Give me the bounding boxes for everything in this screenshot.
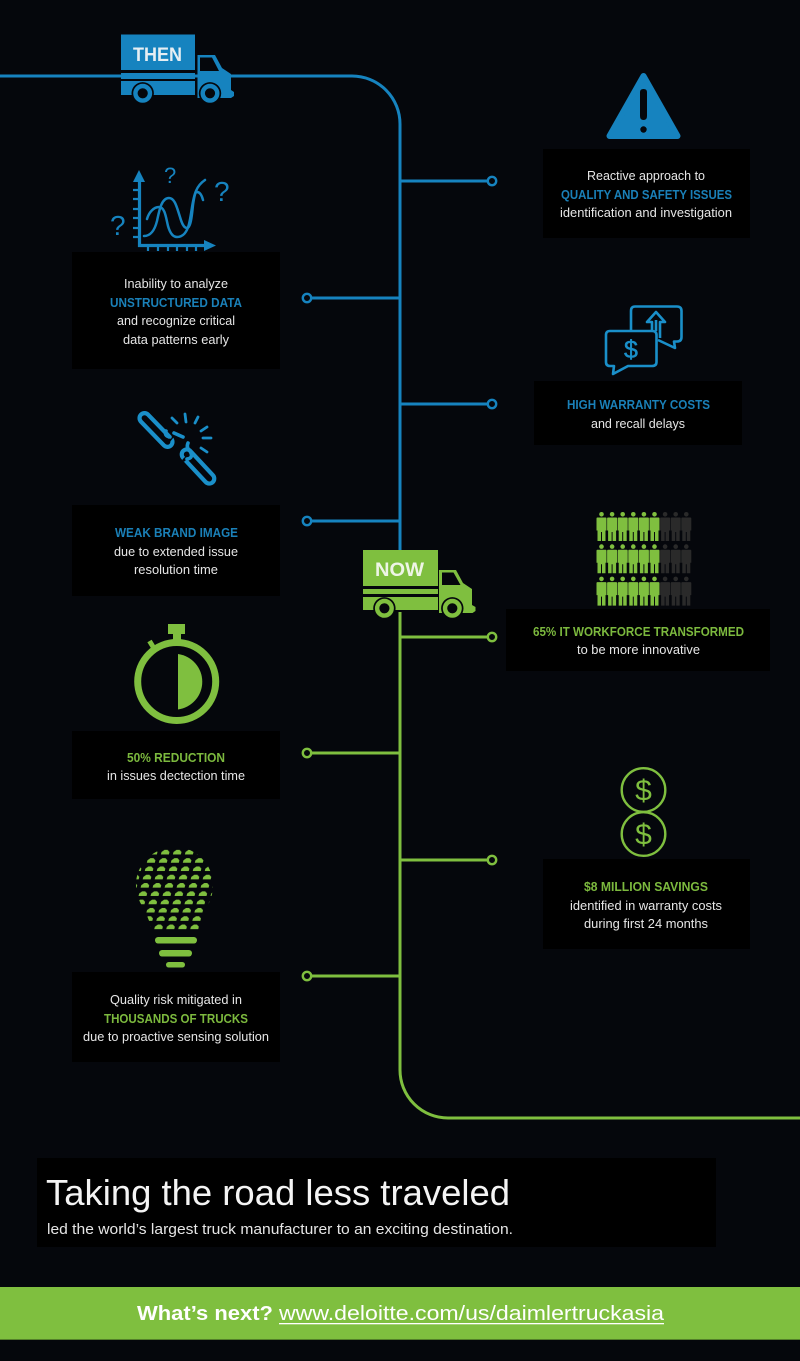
icon: light bulb of trucks	[136, 847, 213, 968]
panel: 50% reduction: in issues dectection time	[107, 769, 245, 783]
panel: high warranty costs: HIGH WARRANTY COSTS	[567, 398, 710, 412]
panel: unstructured data: and recognize critical	[117, 314, 235, 328]
panel: weak brand image: due to extended issue	[114, 545, 238, 559]
icon: two dollar coins: $	[635, 774, 652, 808]
icon: two dollar coins: $	[635, 818, 652, 852]
icon: warning triangle	[610, 76, 678, 136]
icon: NOW truck	[363, 550, 476, 620]
panel: quality and safety issues: Reactive approach to	[587, 169, 705, 183]
panel: unstructured data: Inability to analyze	[124, 277, 228, 291]
icon: stopwatch half	[138, 624, 216, 720]
icon: two dollar coins	[622, 768, 665, 856]
connector: IT workforce	[400, 633, 496, 641]
panel: $8 million savings: during first 24 months	[584, 917, 708, 931]
panel: IT workforce transformed	[506, 609, 770, 671]
panel: thousands of trucks: Quality risk mitigated in	[110, 993, 242, 1007]
panel: $8 million savings: $8 MILLION SAVINGS	[584, 880, 708, 894]
closing statement panel	[37, 1158, 716, 1247]
connector: warranty costs	[400, 400, 496, 408]
connector: savings	[400, 856, 496, 864]
road line: then (blue)	[0, 76, 400, 552]
panel: unstructured data	[72, 252, 280, 369]
footer band	[0, 1287, 800, 1340]
panel: weak brand image	[72, 505, 280, 596]
connector: quality and safety	[400, 177, 496, 185]
icon: THEN truck	[121, 34, 234, 105]
icon: chat bubbles with dollar and arrow	[606, 306, 682, 374]
panel: $8 million savings	[543, 859, 750, 949]
panel: thousands of trucks	[72, 972, 280, 1062]
icon: chart with question marks: ?	[164, 163, 176, 188]
panel: thousands of trucks: THOUSANDS OF TRUCKS	[104, 1012, 248, 1026]
panel: unstructured data: UNSTRUCTURED DATA	[110, 296, 242, 310]
panel: quality and safety issues: identification and investigation	[560, 206, 732, 220]
connector: brand image	[303, 517, 400, 525]
icon: chat bubbles with dollar and arrow: $	[624, 336, 638, 364]
icon: chart with question marks: ?	[110, 210, 126, 241]
connector: thousands of trucks	[303, 972, 400, 980]
heading: Taking the road less traveled	[46, 1172, 510, 1213]
panel: $8 million savings: identified in warranty costs	[570, 899, 722, 913]
connector: reduction	[303, 749, 400, 757]
icon: broken chain link	[137, 411, 216, 486]
panel: IT workforce transformed: to be more innovative	[577, 643, 700, 657]
panel: quality and safety issues: QUALITY AND SAFETY ISSUES	[561, 188, 732, 202]
footer band: www.deloitte.com/us/daimlertruckasia	[278, 1302, 665, 1325]
panel: unstructured data: data patterns early	[123, 333, 230, 347]
road line: now (green)	[400, 612, 800, 1118]
icon: chart with question marks: ?	[214, 176, 230, 207]
panel: quality and safety issues	[543, 149, 750, 238]
panel: 50% reduction	[72, 731, 280, 799]
panel: weak brand image: resolution time	[134, 563, 218, 577]
icon: workforce people grid	[596, 512, 691, 606]
closing subtitle: led the world’s largest truck manufacturer to an exciting destination.	[47, 1222, 513, 1238]
connector: unstructured data	[303, 294, 400, 302]
panel: high warranty costs	[534, 381, 742, 445]
icon: NOW truck: NOW	[375, 560, 424, 581]
panel: weak brand image: WEAK BRAND IMAGE	[115, 526, 238, 540]
footer band: What’s next?	[137, 1302, 273, 1325]
panel: 50% reduction: 50% REDUCTION	[127, 751, 225, 765]
icon: THEN truck: THEN	[133, 45, 182, 66]
icon: chart with question marks	[110, 163, 230, 251]
panel: high warranty costs: and recall delays	[591, 417, 685, 431]
panel: thousands of trucks: due to proactive sensing solution	[83, 1030, 269, 1044]
panel: IT workforce transformed: 65% IT WORKFORCE TRANSFORMED	[533, 625, 744, 639]
